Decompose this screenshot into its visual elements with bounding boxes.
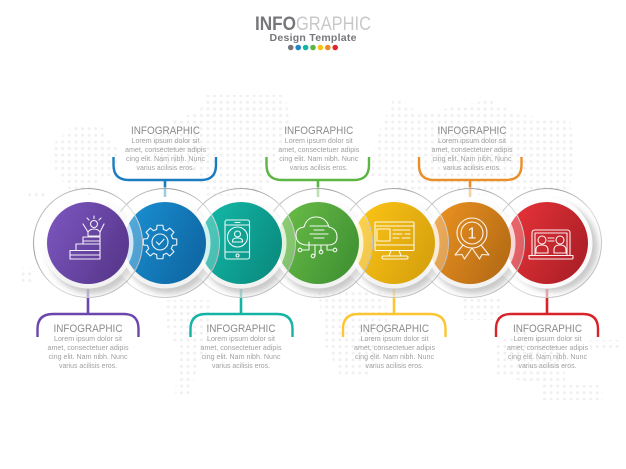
text block: step 7 bottom: amet, consectetuer adipis <box>507 343 588 352</box>
text block: step 4 top: varius acilisis eros. <box>290 163 348 172</box>
bracket: purple bottom <box>38 289 138 337</box>
text block: step 4 top <box>278 125 360 172</box>
text block: step 6 top: varius acilisis eros. <box>443 163 501 172</box>
bracket: yellow bottom <box>343 289 446 337</box>
text block: step 7 bottom: varius acilisis eros. <box>518 361 576 370</box>
text block: step 1 bottom: Lorem ipsum dolor sit <box>54 334 123 343</box>
bracket: orange top <box>419 157 522 197</box>
text block: step 6 top: amet, consectetuer adipis <box>432 145 513 154</box>
text block: step 1 bottom: amet, consectetuer adipis <box>48 343 129 352</box>
bracket: green top <box>266 157 369 197</box>
bracket: teal bottom <box>190 289 292 337</box>
text block: step 6 top: INFOGRAPHIC <box>438 125 507 137</box>
title: Design Template <box>270 32 357 44</box>
text block: step 5 bottom: INFOGRAPHIC <box>360 323 429 335</box>
text block: step 3 bottom: varius acilisis eros. <box>212 361 270 370</box>
title: GRAPHIC <box>296 13 371 35</box>
text block: step 2 top: INFOGRAPHIC <box>131 125 200 137</box>
text block: step 1 bottom: cing elit. Nam nibh. Nunc <box>48 352 128 361</box>
step 5: yellow circle <box>340 188 448 298</box>
text block: step 7 bottom: cing elit. Nam nibh. Nunc <box>508 352 587 361</box>
text block: step 4 top: cing elit. Nam nibh. Nunc <box>279 154 359 163</box>
step 2: blue circle <box>110 188 220 298</box>
text block: step 2 top: varius acilisis eros. <box>136 163 194 172</box>
text block: step 1 bottom: INFOGRAPHIC <box>54 323 123 335</box>
text block: step 1 bottom <box>48 323 129 370</box>
text block: step 2 top: amet, consectetuer adipis <box>125 145 206 154</box>
text block: step 5 bottom: varius acilisis eros. <box>366 361 424 370</box>
text block: step 6 top <box>432 125 513 172</box>
text block: step 2 top <box>125 125 206 172</box>
step 3: teal circle <box>186 188 296 298</box>
text block: step 3 bottom <box>200 323 282 370</box>
text block: step 5 bottom <box>354 323 435 370</box>
text block: step 3 bottom: amet, consectetuer adipis <box>200 343 282 352</box>
text block: step 1 bottom: varius acilisis eros. <box>59 361 117 370</box>
text block: step 3 bottom: cing elit. Nam nibh. Nunc <box>202 352 281 361</box>
circle drop shadows <box>47 202 598 294</box>
text block: step 7 bottom: Lorem ipsum dolor sit <box>514 334 582 343</box>
icon: gear with check <box>143 225 177 259</box>
text block: step 3 bottom: Lorem ipsum dolor sit <box>207 334 276 343</box>
dotted world map background <box>0 85 626 405</box>
step 1: purple circle <box>34 188 142 298</box>
icon: person on stairs <box>70 216 104 259</box>
text block: step 4 top: amet, consectetuer adipis <box>278 145 360 154</box>
step 7: red circle <box>492 188 602 298</box>
text block: step 5 bottom: amet, consectetuer adipis <box>354 343 435 352</box>
text block: step 4 top: Lorem ipsum dolor sit <box>285 136 354 145</box>
text block: step 2 top: cing elit. Nam nibh. Nunc <box>126 154 205 163</box>
step 4: green circle <box>264 188 372 298</box>
icon: smartphone profile <box>225 220 250 259</box>
text block: step 7 bottom: INFOGRAPHIC <box>513 323 582 335</box>
bracket: blue top <box>114 157 216 197</box>
icon: desktop monitor <box>375 222 414 259</box>
text block: step 6 top: cing elit. Nam nibh. Nunc <box>432 154 512 163</box>
text block: step 2 top: Lorem ipsum dolor sit <box>132 136 200 145</box>
palette dots <box>288 45 338 50</box>
bracket: red bottom <box>496 289 598 337</box>
text block: step 4 top: INFOGRAPHIC <box>284 125 354 137</box>
icon: video call laptop <box>529 230 573 259</box>
text block: step 7 bottom <box>507 323 588 370</box>
text block: step 5 bottom: cing elit. Nam nibh. Nunc <box>355 352 434 361</box>
step 6: orange circle <box>416 188 524 298</box>
title: INFO <box>255 13 296 35</box>
icon: award medal: 1 <box>468 226 477 242</box>
icon: cloud network <box>296 217 337 258</box>
title <box>255 13 371 44</box>
text block: step 3 bottom: INFOGRAPHIC <box>206 323 276 335</box>
text block: step 6 top: Lorem ipsum dolor sit <box>438 136 507 145</box>
text block: step 5 bottom: Lorem ipsum dolor sit <box>360 334 429 343</box>
